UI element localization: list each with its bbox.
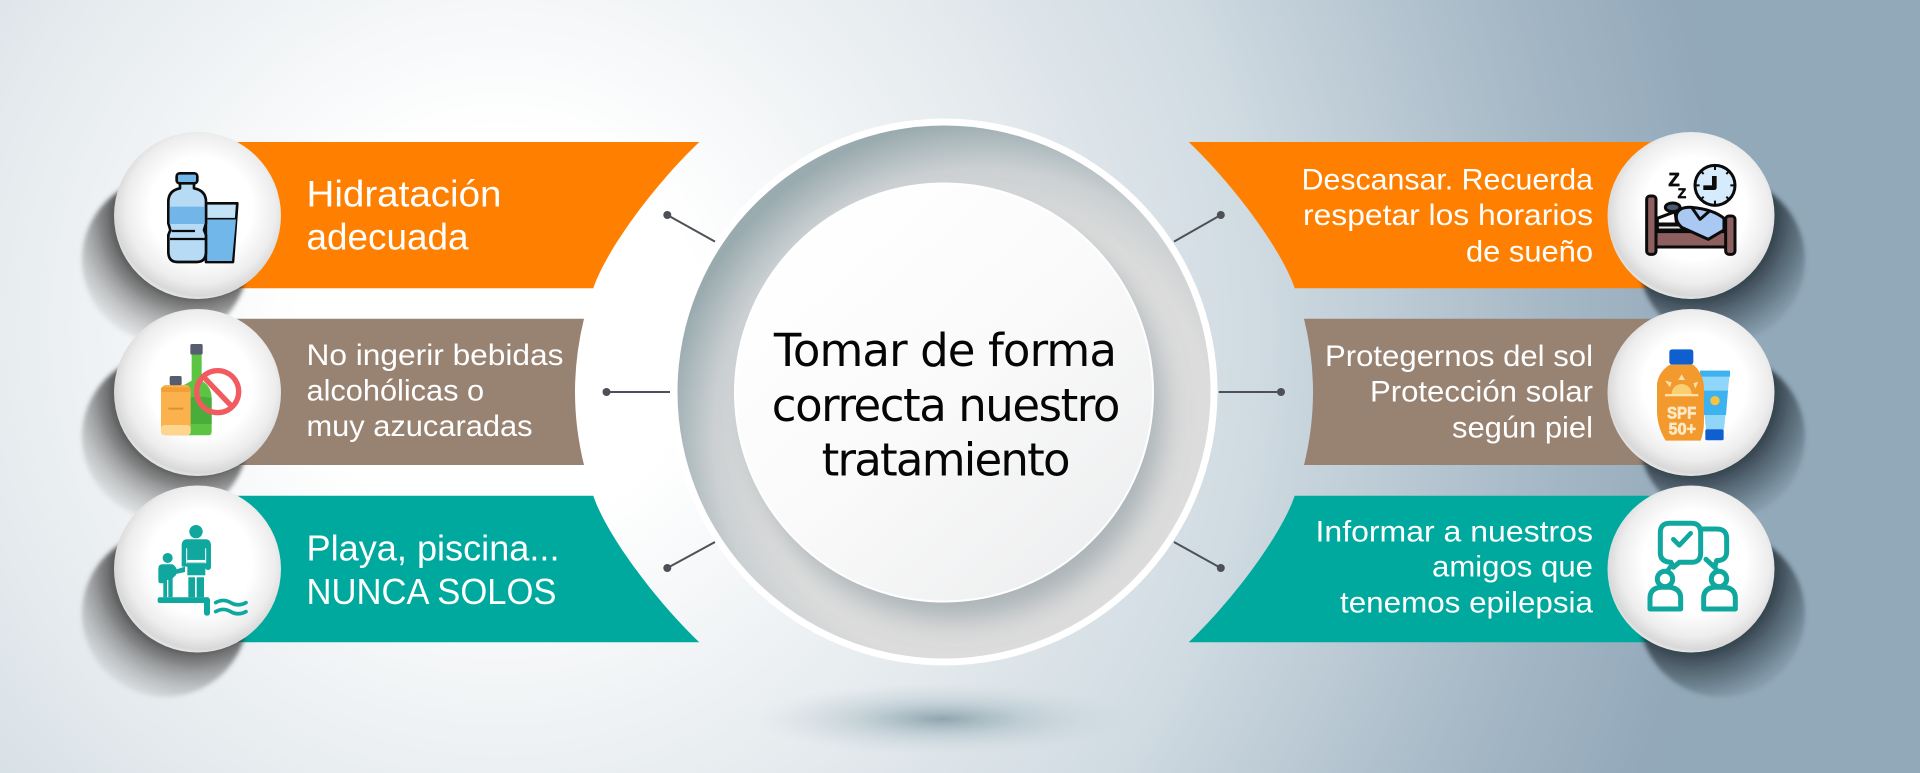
text: informar a nuestros amigos: Informar a nuestros — [1316, 516, 1593, 549]
letters z z — [1668, 169, 1687, 201]
connector: top left — [663, 211, 715, 242]
sphere — [114, 132, 281, 299]
text: descansar: de sueño — [1466, 236, 1593, 269]
text: descansar — [1302, 163, 1593, 269]
title — [772, 324, 1120, 486]
letters z z: Z — [1678, 185, 1687, 201]
sphere shadow — [1639, 177, 1805, 343]
text: protegernos del sol — [1325, 340, 1593, 444]
teal banner — [1189, 496, 1690, 642]
panel: descansar — [1189, 132, 1805, 343]
text: informar a nuestros amigos — [1316, 516, 1593, 620]
sphere — [1608, 309, 1774, 476]
text: protegernos del sol: Protegernos del sol — [1325, 340, 1593, 373]
text: hidratación adecuada: adecuada — [306, 216, 469, 257]
panel: hidratación — [82, 132, 699, 343]
sphere — [114, 309, 281, 476]
label: SPF 50+: SPF — [1667, 404, 1696, 423]
sphere shadow — [1639, 354, 1805, 520]
letters z z: Z — [1668, 169, 1680, 190]
floor shadow under central circle — [752, 683, 1132, 755]
grey ring — [678, 126, 1210, 658]
orange banner — [1189, 142, 1690, 288]
connector: top right — [1174, 211, 1225, 242]
connector: middle right — [1219, 388, 1285, 396]
text: no ingerir bebidas — [306, 339, 564, 443]
text: informar a nuestros amigos: tenemos epilepsia — [1340, 587, 1593, 620]
text: playa, piscina nunca solos: NUNCA SOLOS — [306, 571, 556, 612]
orange banner — [200, 142, 699, 288]
sphere shadow — [82, 531, 248, 697]
text: descansar: respetar los horarios — [1303, 199, 1593, 232]
text: descansar: Descansar. Recuerda — [1302, 163, 1593, 196]
text: protegernos del sol: Protección solar — [1370, 376, 1593, 409]
sphere — [1608, 486, 1774, 652]
brown banner — [200, 319, 584, 465]
text: playa, piscina nunca solos: Playa, piscina... — [306, 528, 560, 569]
text: no ingerir bebidas: alcohólicas o — [306, 375, 484, 408]
central circle — [670, 118, 1218, 666]
text: protegernos del sol: según piel — [1452, 411, 1593, 444]
panel: informar amigos — [1189, 486, 1805, 697]
connector: bottom left — [663, 542, 715, 572]
sphere shadow — [82, 354, 248, 520]
text: no ingerir bebidas: No ingerir bebidas — [306, 339, 564, 372]
sphere — [1608, 132, 1774, 299]
inner white disc — [735, 184, 1153, 602]
text: hidratación adecuada — [306, 174, 502, 257]
text: informar a nuestros amigos: amigos que — [1432, 551, 1593, 584]
panel: protección solar — [1304, 309, 1805, 520]
icon: water bottle and glass — [168, 173, 237, 262]
icon: person sleeping with clock — [1647, 165, 1735, 254]
text: no ingerir bebidas: muy azucaradas — [306, 410, 532, 443]
connector lines — [602, 211, 1285, 572]
text: playa, piscina nunca solos — [306, 528, 560, 612]
icon: two people talking — [1650, 523, 1735, 609]
teal banner — [200, 496, 699, 642]
icon: bottles with prohibition sign — [161, 344, 239, 435]
connector: middle left — [602, 388, 670, 396]
label: SPF 50+: 50+ — [1669, 419, 1696, 438]
icon: adult and child by the water — [158, 525, 246, 616]
inner circle shadow — [749, 205, 1163, 619]
title: tratamiento — [822, 434, 1071, 486]
sphere shadow — [1639, 531, 1805, 697]
sphere shadow — [82, 177, 248, 343]
label: SPF 50+ — [1667, 404, 1696, 438]
text: hidratación adecuada: Hidratación — [306, 174, 502, 215]
panel: playa — [82, 486, 699, 697]
brown banner — [1304, 319, 1690, 465]
outer white ring — [670, 118, 1218, 666]
sphere — [114, 486, 281, 652]
icon: sunscreen bottle and tube — [1657, 349, 1730, 441]
title: correcta nuestro — [772, 379, 1120, 432]
title: Tomar de forma — [773, 324, 1117, 377]
connector: bottom right — [1174, 542, 1225, 572]
panel: no alcohol — [82, 309, 584, 520]
